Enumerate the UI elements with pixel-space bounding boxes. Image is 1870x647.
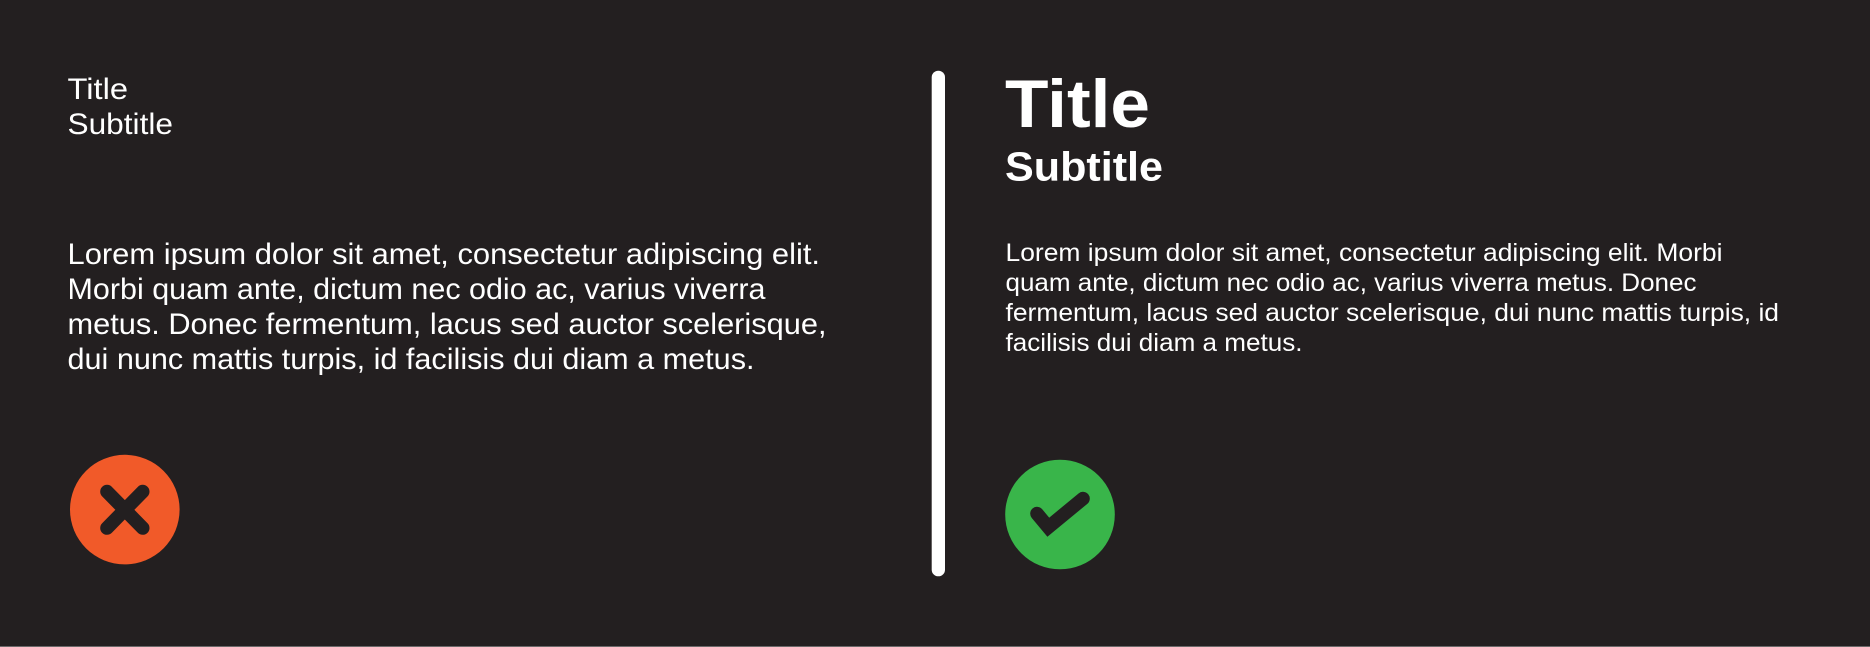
text block: right body copy: facilisis dui diam a metus. xyxy=(1006,329,1302,357)
heading: left title and subtitle xyxy=(68,73,173,141)
text block: left body copy xyxy=(68,238,826,376)
text block: right body copy: Lorem ipsum dolor sit amet, consectetur adipiscing elit. Morbi xyxy=(1006,239,1722,267)
text block: left body copy: Morbi quam ante, dictum nec odio ac, varius viverra xyxy=(68,273,766,306)
text block: right body copy: fermentum, lacus sed auctor scelerisque, dui nunc mattis turpis, id xyxy=(1006,299,1779,327)
panel: right strong hierarchy example xyxy=(1005,66,1779,569)
text block: left body copy: metus. Donec fermentum, lacus sed auctor scelerisque, xyxy=(68,308,826,341)
heading: right bold subtitle: Subtitle xyxy=(1005,144,1163,190)
text block: left body copy: Lorem ipsum dolor sit amet, consectetur adipiscing elit. xyxy=(68,238,820,271)
text block: left body copy: dui nunc mattis turpis, id facilisis dui diam a metus. xyxy=(68,343,754,376)
icon: orange cross badge xyxy=(70,455,180,564)
panel: left weak hierarchy example xyxy=(68,73,826,564)
icon: green check badge xyxy=(1005,460,1115,569)
heading: right bold title: Title xyxy=(1005,66,1150,142)
text block: right body copy xyxy=(1006,239,1779,357)
heading: left title and subtitle: Subtitle xyxy=(68,108,173,141)
heading: left title and subtitle: Title xyxy=(68,73,128,106)
text block: right body copy: quam ante, dictum nec odio ac, varius viverra metus. Donec xyxy=(1006,269,1696,297)
divider: vertical white bar xyxy=(932,71,945,576)
